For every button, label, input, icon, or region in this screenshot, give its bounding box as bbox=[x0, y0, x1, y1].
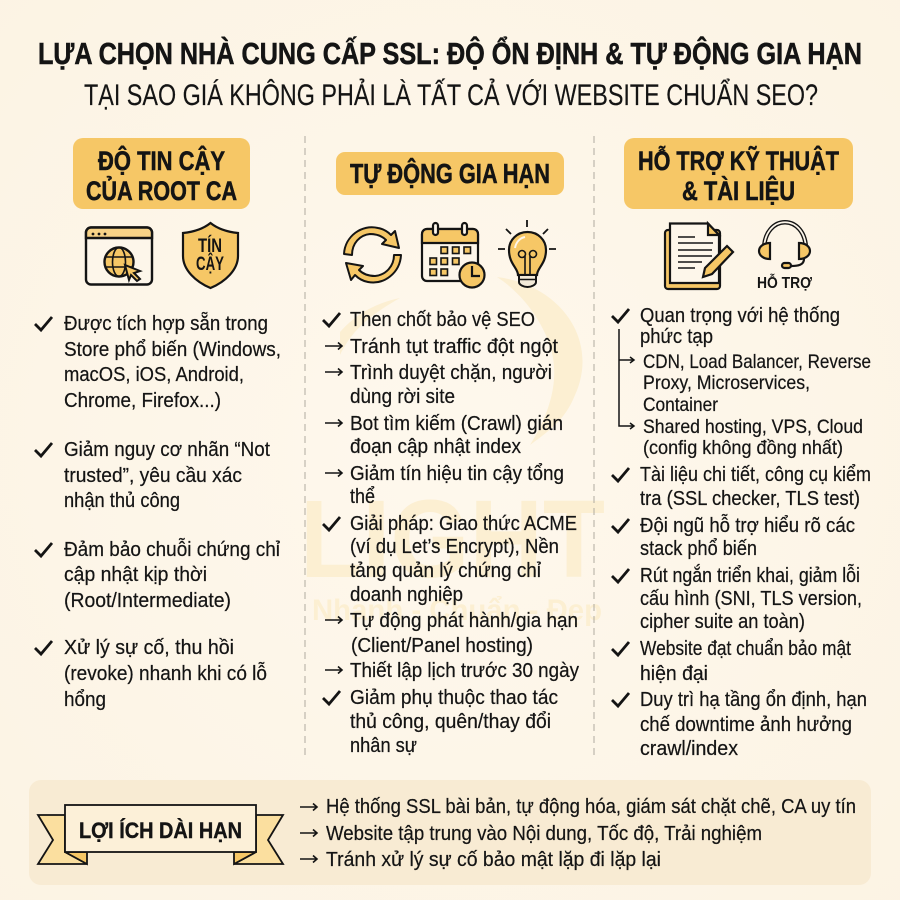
bullet: SEO protection: Then chốt bảo vệ SEO bbox=[350, 308, 535, 331]
heading: auto renewal bbox=[336, 152, 564, 195]
bullet: browser block: Trình duyệt chặn, người bbox=[350, 361, 552, 384]
panel: auto renewal bbox=[323, 152, 580, 757]
bullet: automatic issuing: (Client/Panel hosting) bbox=[351, 634, 533, 657]
bullet: browser block: dùng rời site bbox=[350, 385, 455, 408]
icon: trust shield bbox=[183, 223, 238, 288]
bullet: documentation bbox=[612, 463, 871, 510]
bullet: faster deployment: cấu hình (SNI, TLS version, bbox=[640, 587, 862, 610]
bullet: complex systems: Quan trọng với hệ thống bbox=[640, 304, 840, 327]
banner: long-term benefits bbox=[38, 805, 283, 864]
watermark logo: Nhanh - Chuẩn - Đẹp bbox=[312, 594, 602, 627]
bullet: built-in store: Được tích hợp sẵn trong bbox=[64, 312, 268, 335]
bullet: chain of trust bbox=[35, 538, 280, 612]
bullet: complex systems: CDN, Load Balancer, Reverse bbox=[643, 351, 871, 373]
bullet: stable infrastructure bbox=[612, 688, 867, 760]
bullet: trust signal: thể bbox=[350, 485, 375, 508]
panel: technical support and docs bbox=[612, 138, 871, 760]
icon: light bulb bbox=[498, 220, 556, 287]
heading: support bbox=[624, 138, 853, 209]
bullet: faster deployment bbox=[612, 564, 862, 633]
bullet: documentation: tra (SSL checker, TLS test) bbox=[640, 487, 860, 510]
bullet: stable infrastructure: crawl/index bbox=[640, 737, 739, 760]
watermark logo bbox=[300, 277, 605, 627]
bullet: support team bbox=[612, 514, 855, 560]
bullet: chain of trust: cập nhật kịp thời bbox=[64, 563, 207, 586]
bullet: crawl interruption: đoạn cập nhật index bbox=[350, 435, 522, 458]
bullet: automatic issuing bbox=[325, 609, 578, 657]
bullet: ACME solution: tảng quản lý chứng chỉ bbox=[350, 559, 541, 582]
bullet: complex systems: Proxy, Microservices, bbox=[643, 372, 810, 394]
bullet: 30 days schedule: Thiết lập lịch trước 30 ngày bbox=[350, 659, 580, 682]
bullet: built-in store: macOS, iOS, Android, bbox=[64, 363, 244, 386]
label: support: HỖ TRỢ bbox=[757, 273, 812, 292]
bullet: faster deployment: Rút ngắn triển khai, giảm lỗi bbox=[640, 564, 860, 587]
bullet: ACME solution: (ví dụ Let’s Encrypt), Nền bbox=[350, 535, 559, 558]
bullet: documentation: Tài liệu chi tiết, công cụ kiểm bbox=[640, 463, 871, 486]
bullet: automatic issuing: Tự động phát hành/gia hạn bbox=[350, 609, 578, 632]
bullet: stable infrastructure: chế downtime ảnh hưởng bbox=[640, 713, 852, 736]
bullet: support team: stack phổ biến bbox=[640, 537, 757, 560]
bullet: stable infrastructure: Duy trì hạ tầng ổn định, hạn bbox=[640, 688, 867, 711]
bullet: not trusted: trusted”, yêu cầu xác bbox=[64, 464, 242, 487]
title bbox=[38, 35, 862, 112]
bullet: complex systems bbox=[612, 304, 871, 459]
bullet: complex systems: Shared hosting, VPS, Cloud bbox=[643, 416, 863, 438]
bullet: incident handling: Xử lý sự cố, thu hồi bbox=[64, 636, 234, 659]
bullet: not trusted: Giảm nguy cơ nhãn “Not bbox=[64, 438, 270, 461]
bullet: ACME solution bbox=[323, 512, 577, 606]
bullet: reduce manual work bbox=[323, 686, 558, 757]
bullet: crawl interruption: Bot tìm kiếm (Crawl) gián bbox=[350, 412, 563, 435]
icon: trust shield: TÍN bbox=[198, 235, 222, 257]
bullet: incident handling: (revoke) nhanh khi có lỗ bbox=[64, 662, 267, 685]
bullet: faster deployment: cipher suite an toàn) bbox=[640, 610, 805, 633]
bullet: complex systems: (config không đồng nhất) bbox=[643, 437, 843, 459]
bullet: reduce manual work: Giảm phụ thuộc thao tác bbox=[350, 686, 558, 709]
icon: document and pencil bbox=[665, 224, 733, 289]
bullet: trust signal: Giảm tín hiệu tin cậy tổng bbox=[350, 462, 564, 485]
bullet: built-in store: Store phổ biến (Windows, bbox=[64, 338, 281, 361]
bullet: built-in store bbox=[35, 312, 281, 412]
panel: long-term benefits bbox=[29, 780, 871, 885]
bullet: built-in store: Chrome, Firefox...) bbox=[64, 389, 221, 412]
bullet: modern security: Website đạt chuẩn bảo mật bbox=[640, 637, 851, 660]
bullet: support team: Đội ngũ hỗ trợ hiểu rõ các bbox=[640, 514, 855, 537]
icon: headset bbox=[759, 222, 810, 268]
bullet: incident handling: hổng bbox=[64, 688, 106, 711]
heading: root CA: CỦA ROOT CA bbox=[86, 176, 237, 206]
bullet: chain of trust: Đảm bảo chuỗi chứng chỉ bbox=[64, 538, 280, 561]
bullet: modern security: hiện đại bbox=[640, 662, 708, 685]
bullet: reduce manual work: nhân sự bbox=[350, 734, 417, 757]
heading: auto renewal: TỰ ĐỘNG GIA HẠN bbox=[350, 157, 550, 189]
bullet: chain of trust: (Root/Intermediate) bbox=[64, 589, 231, 612]
banner: long-term benefits: LỢI ÍCH DÀI HẠN bbox=[79, 818, 242, 843]
bullet: not trusted: nhận thủ công bbox=[64, 489, 180, 512]
bullet: crawl interruption bbox=[325, 412, 563, 458]
panel: root CA reliability bbox=[35, 138, 281, 711]
bullet: complex systems: Container bbox=[643, 394, 718, 416]
bullet: complex systems: phức tạp bbox=[640, 325, 713, 348]
heading: root CA bbox=[73, 138, 250, 209]
bullet: not trusted bbox=[35, 438, 270, 512]
bullet: traffic drop: Tránh tụt traffic đột ngột bbox=[350, 335, 558, 358]
icon: calendar with clock bbox=[422, 223, 484, 288]
bullet: trust signal bbox=[325, 462, 564, 508]
benefit: SSL system: Hệ thống SSL bài bản, tự động hóa, giám sát chặt chẽ, CA uy tín bbox=[326, 795, 856, 818]
icon: trust shield: CẬY bbox=[196, 253, 224, 275]
icon: browser with globe bbox=[86, 228, 152, 284]
benefit: website focus: Website tập trung vào Nội dung, Tốc độ, Trải nghiệm bbox=[326, 822, 762, 845]
bullet: reduce manual work: thủ công, quên/thay đổi bbox=[350, 710, 551, 733]
benefit: avoid incidents: Tránh xử lý sự cố bảo mật lặp đi lặp lại bbox=[326, 848, 661, 871]
bullet: incident handling bbox=[35, 636, 267, 711]
icon: refresh arrows bbox=[344, 227, 401, 282]
heading: support: & TÀI LIỆU bbox=[682, 176, 795, 206]
heading: support: HỖ TRỢ KỸ THUẬT bbox=[638, 146, 839, 176]
bullet: browser block bbox=[325, 361, 552, 408]
heading: root CA: ĐỘ TIN CẬY bbox=[98, 146, 225, 176]
watermark logo: LIGHT bbox=[300, 478, 605, 601]
bullet: modern security bbox=[612, 637, 851, 685]
bullet: ACME solution: Giải pháp: Giao thức ACME bbox=[350, 512, 577, 535]
bullet: ACME solution: doanh nghiệp bbox=[350, 583, 463, 606]
